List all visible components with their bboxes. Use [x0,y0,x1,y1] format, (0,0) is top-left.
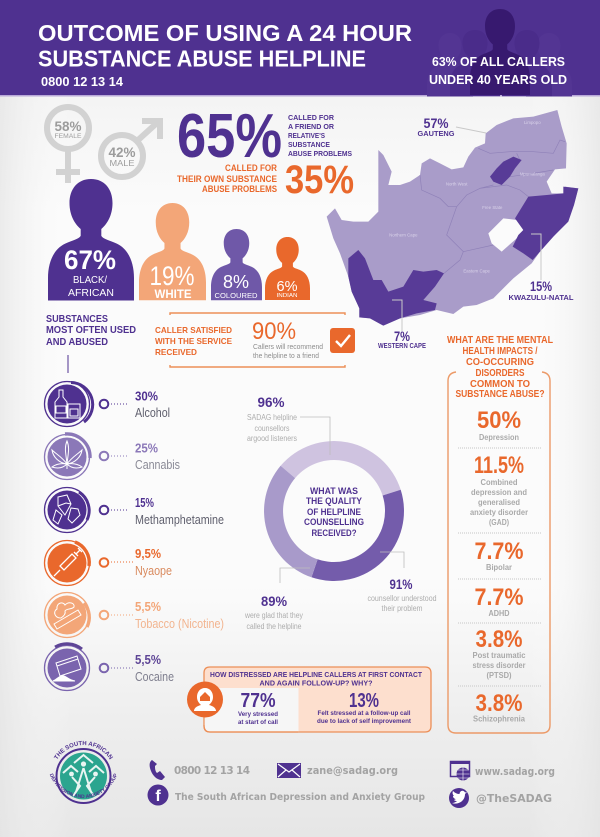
stat: bipolar: Bipolar [486,563,512,572]
icon: checkbox [330,328,355,353]
heading: substances [46,314,136,373]
callout: 63 percent under 40: 63% OF ALL CALLERS [432,55,565,69]
heading: substances: SUBSTANCES [46,314,108,325]
callout: 91% understood: counsellor understood [368,594,436,603]
heading: substances: AND ABUSED [46,337,108,348]
region: Gauteng [490,157,522,185]
item: alcohol 30%: 30% [135,388,158,404]
figure: black/african 67%: AFRICAN [68,287,114,299]
region: Western Cape [348,250,444,326]
stat: 65 percent called for a friend: CALLED FOR [288,113,335,122]
stat: GAD: generalised [478,498,520,507]
distress question [210,670,422,688]
donut centre question: THE QUALITY [306,496,363,507]
item: cannabis 25%: Cannabis [135,457,180,472]
icon: cigarette and smoke [54,603,81,629]
item: tobacco 5.5%: 5,5% [135,599,161,614]
stat: 35 percent called for themselves: CALLED FOR [225,163,277,173]
callout: 96% good listeners [247,394,330,455]
province labels: Free State [482,205,503,210]
icon: female symbol 58%: 58% [54,118,82,134]
icon: crystals [53,495,80,524]
icon: stressed caller with headset [187,682,223,718]
item: cannabis 25%: 25% [135,440,158,456]
title: SUBSTANCE ABUSE HELPLINE [38,46,366,72]
logo: SADAG: DEPRESSION AND ANXIETY GROUP [50,773,116,798]
callout: 91% understood [368,552,436,613]
panel heading: COMMON TO [470,379,530,390]
item: tobacco 5.5% [44,592,224,638]
callout: 89% glad they called [244,568,310,631]
stat: depression: Depression [479,433,519,442]
stat: PTSD: 3.8% [476,626,522,653]
callout: 96% good listeners: counsellors [254,424,290,433]
contact: twitter [449,788,552,808]
panel heading: HEALTH IMPACTS / [462,346,538,357]
panel: distress at first contact and follow-up [187,667,431,732]
figure: white 19%: 19% [150,261,194,291]
icon: male symbol 42% [101,121,160,177]
stat: 77% very stressed: at start of call [238,719,278,726]
stat: ADHD: ADHD [488,609,510,618]
stat: 13% felt stressed: due to lack of self improvement [317,718,412,725]
contact: twitter: @TheSADAG [476,793,552,805]
figure: black/african 67%: 67% [64,245,116,275]
title: 0800 12 13 14 [41,75,123,89]
donut centre question: RECEIVED? [312,528,357,539]
icon: female symbol 58% [47,107,89,183]
item: alcohol 30%: Alcohol [135,405,170,420]
icon: syringe [54,548,82,576]
panel: caller satisfied: WITH THE SERVICE [155,336,232,346]
stat: 65 percent called for a friend: 65% [177,102,282,171]
header banner [0,0,600,96]
figure: white 19%: WHITE [154,287,192,301]
map label: Gauteng 57%: GAUTENG [418,129,455,138]
stat: GAD: Combined [480,478,518,487]
callout: 91% understood: their problem [382,604,423,613]
panel: caller satisfied [155,313,355,367]
contact: website: www.sadag.org [475,766,555,778]
item: cocaine 5.5%: 5,5% [135,652,161,667]
map label: Gauteng 57%: 57% [424,115,449,131]
distress question: AND AGAIN FOLLOW-UP? WHY? [260,678,373,688]
callout: 63 percent under 40 [429,55,567,87]
callout: 96% good listeners: 96% [258,394,285,410]
callout: 63 percent under 40: UNDER 40 YEARS OLD [429,73,567,87]
figure: white 19% [139,203,206,301]
figure: coloured 8%: 8% [223,272,249,292]
item: nyaope 9.5%: 9,5% [135,546,161,561]
map label: Gauteng 57% [418,115,486,138]
stat: 65 percent called for a friend: SUBSTANCE [288,140,330,149]
item: cocaine 5.5%: Cocaine [135,669,174,684]
province labels: Northern Cape [389,232,418,237]
stat: PTSD: (PTSD) [486,671,512,680]
donut centre question: WHAT WAS [310,486,358,497]
item: tobacco 5.5%: Tobacco (Nicotine) [135,616,224,631]
distress question: HOW DISTRESSED ARE HELPLINE CALLERS AT FIRST CONTACT [210,670,422,679]
figure: black/african 67% [48,179,134,301]
icon: bottle and glass [55,390,80,418]
stat: 13% felt stressed: 13% [349,690,379,712]
contact: phone [150,760,250,780]
title [38,20,412,89]
contact: facebook: The South African Depression and Anxiety Group [175,792,425,803]
callout: 89% glad they called: 89% [261,593,288,609]
stat: 65 percent called for a friend: A FRIEND OR [288,122,335,131]
panel: caller satisfied: 90% [252,318,296,345]
panel heading: CO-OCCURING [466,357,534,368]
region: KwaZulu-Natal [513,187,578,260]
callout: 96% good listeners: SADAG helpline [247,413,297,422]
panel: caller satisfied: CALLER SATISFIED [155,325,232,335]
province labels: North West [446,182,468,187]
stat: 35 percent called for themselves: THEIR OWN SUBSTANCE [177,174,277,184]
stat: PTSD [472,626,526,680]
item: cannabis 25% [44,434,180,480]
icon: female symbol 58%: FEMALE [54,133,82,140]
donut chart: quality of counselling [264,441,404,581]
panel heading: SUBSTANCE ABUSE? [456,389,544,400]
figure: coloured 8%: COLOURED [214,291,258,300]
callout: 91% understood: 91% [390,576,413,592]
panel: mental health impacts [447,335,553,733]
logo: SADAG [50,740,116,804]
callout: 89% glad they called: were glad that they [244,611,303,620]
stat: 77% very stressed: 77% [240,690,276,712]
title: OUTCOME OF USING A 24 HOUR [38,20,412,46]
contact: facebook [148,784,425,806]
stat: 35 percent called for themselves [177,158,354,202]
region: Lesotho [488,218,523,252]
icon: cannabis leaf [52,441,82,469]
stat: 77% very stressed: Very stressed [238,711,278,718]
figure: black/african 67%: BLACK/ [73,274,107,286]
stat: 65 percent called for a friend: RELATIVE'S [288,131,325,140]
panel heading: WHAT ARE THE MENTAL [447,335,553,346]
panel: caller satisfied: Callers will recommend [253,342,323,351]
map label: Western Cape 7%: WESTERN CAPE [378,343,426,350]
donut centre question: COUNSELLING [304,517,364,528]
stat: 13% felt stressed [317,690,412,725]
contact: phone: 0800 12 13 14 [174,765,250,777]
map label: KwaZulu-Natal 15%: KWAZULU-NATAL [508,293,574,302]
contact: website [450,761,555,780]
stat: 35 percent called for themselves: ABUSE PROBLEMS [202,184,277,194]
item: cocaine 5.5% [44,644,174,690]
contact: email: zane@sadag.org [307,765,398,777]
province labels: Limpopo [524,120,541,125]
province labels: Eastern Cape [463,268,490,273]
item: nyaope 9.5%: Nyaope [135,563,172,578]
stat: 77% very stressed [238,690,278,726]
item: methamphetamine 15%: Methamphetamine [135,512,224,527]
icon: male symbol 42%: 42% [108,144,136,160]
panel: caller satisfied: the helpline to a friend [253,351,319,360]
province labels: Mpumalanga [520,172,545,177]
map label: Western Cape 7% [378,300,426,350]
figure: indian 6%: 6% [276,278,298,295]
icon: bank card and powder [53,656,81,681]
stat: schizophrenia: 3.8% [476,690,522,717]
figure: coloured 8% [211,229,262,300]
donut centre question: OF HELPLINE [307,507,361,518]
donut centre question [304,486,364,539]
stat: GAD: (GAD) [489,518,509,527]
stat: depression: 50% [477,407,521,434]
icon: male symbol 42%: MALE [110,159,134,168]
map label: KwaZulu-Natal 15% [508,234,574,302]
heading: substances: MOST OFTEN USED [46,325,136,336]
item: alcohol 30% [44,382,170,426]
item: nyaope 9.5% [44,540,172,586]
stat: GAD [470,452,528,527]
province labels [389,120,545,273]
stat: 65 percent called for a friend: ABUSE PROBLEMS [288,149,352,158]
map of South Africa [327,110,578,326]
map label: KwaZulu-Natal 15%: 15% [530,278,552,294]
callout: 96% good listeners: argood listeners [247,434,297,443]
icon: silhouettes of callers [427,9,572,96]
item: methamphetamine 15% [44,488,224,532]
stat: ADHD: 7.7% [474,584,524,611]
stat: 13% felt stressed: Felt stressed at a follow-up call [318,710,411,717]
callout: 89% glad they called: called the helpline [246,622,302,631]
stat: GAD: 11.5% [474,452,524,479]
contact: email [277,763,398,778]
stat: schizophrenia: Schizophrenia [473,714,526,724]
figure: indian 6% [265,237,310,300]
panel: caller satisfied: RECEIVED [155,347,197,357]
stat: PTSD: Post traumatic [472,651,526,660]
map label: Western Cape 7%: 7% [394,328,410,344]
logo: SADAG: THE SOUTH AFRICAN [54,740,114,760]
panel heading: DISORDERS [476,368,525,379]
panel heading [447,335,553,400]
stat: bipolar: 7.7% [474,538,524,565]
item: methamphetamine 15%: 15% [135,495,154,510]
contact: facebook: f [155,788,161,805]
stat: 35 percent called for themselves: 35% [285,158,354,202]
figure: indian 6%: INDIAN [276,293,298,299]
stat: GAD: depression and [471,488,527,497]
stat: GAD: anxiety disorder [470,508,528,517]
stat: PTSD: stress disorder [472,661,526,670]
